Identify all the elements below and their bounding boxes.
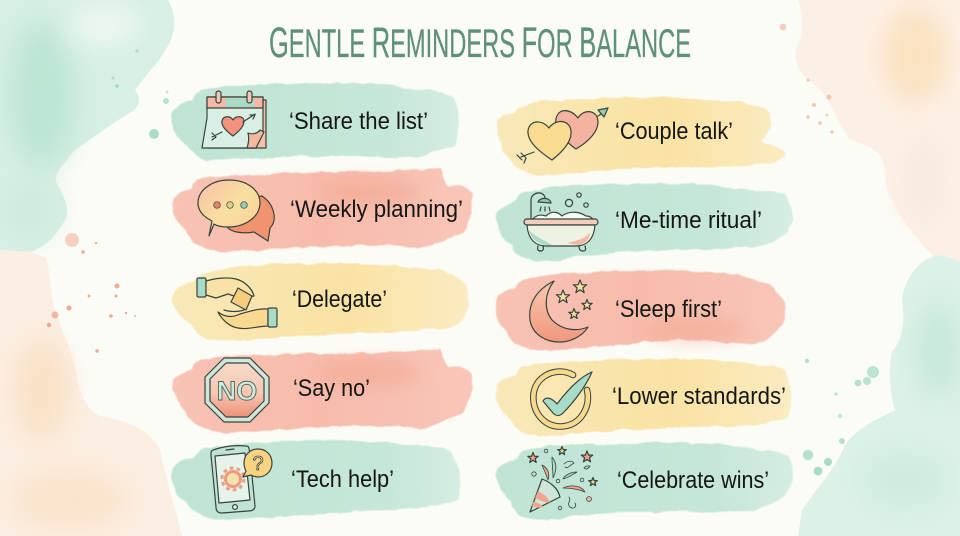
label: me-time ritual: ‘Me-time ritual’ — [615, 207, 762, 234]
label: say no: ‘Say no’ — [293, 375, 370, 402]
icon: NO stop sign — [205, 358, 269, 422]
icon: calendar with heart — [202, 91, 266, 148]
decorative paint splatter — [47, 24, 879, 475]
label: lower standards: ‘Lower standards’ — [612, 383, 786, 410]
yellow brush stroke — [172, 263, 469, 340]
icon: NO stop sign: NO — [217, 376, 257, 406]
panel: couple talk — [497, 97, 785, 176]
three dots — [214, 202, 247, 208]
panel: me-time ritual — [496, 184, 792, 262]
panel: delegate — [172, 263, 469, 340]
icon: crescent moon and stars — [530, 280, 592, 342]
icon: bathtub — [524, 193, 598, 251]
label: couple talk: ‘Couple talk’ — [615, 118, 733, 145]
icon: phone with gear and question mark: ? — [252, 453, 264, 475]
icon: party popper with confetti — [528, 446, 597, 512]
panel: celebrate wins — [496, 442, 793, 520]
panel: tech help — [172, 440, 461, 520]
yellow brush stroke — [497, 97, 785, 176]
label: share the list: ‘Share the list’ — [289, 108, 428, 135]
label: sleep first: ‘Sleep first’ — [615, 296, 722, 323]
panel: weekly planning — [172, 168, 473, 252]
watercolor wash: bottom right green — [798, 256, 960, 536]
icon: phone with gear and question mark — [211, 446, 272, 513]
label: tech help: ‘Tech help’ — [291, 466, 394, 493]
coral brush stroke — [172, 349, 473, 433]
coral brush stroke — [172, 168, 473, 252]
label: celebrate wins: ‘Celebrate wins’ — [617, 467, 769, 494]
icon: hands passing a card — [197, 278, 277, 329]
icon: two hearts with arrow — [517, 108, 608, 163]
watercolor wash: bottom left peach — [0, 250, 182, 536]
title: GENTLE REMINDERS FOR BALANCE — [269, 19, 691, 67]
icon: speech bubbles — [198, 180, 274, 241]
green brush stroke — [496, 442, 793, 520]
watercolor wash: top right peach — [795, 0, 960, 267]
panel: say no — [172, 349, 473, 433]
coral brush stroke — [495, 270, 786, 350]
label: delegate: ‘Delegate’ — [292, 286, 387, 313]
label: weekly planning: ‘Weekly planning’ — [290, 196, 463, 223]
green brush stroke — [172, 440, 461, 520]
panel: sleep first — [495, 270, 786, 350]
green brush stroke — [172, 83, 459, 160]
green brush stroke — [496, 184, 792, 262]
watercolor wash: top left green — [0, 0, 174, 252]
panel: share the list — [172, 83, 459, 160]
icon: check mark in circle — [533, 372, 592, 426]
yellow brush stroke — [495, 359, 792, 436]
panel: lower standards — [495, 359, 792, 436]
